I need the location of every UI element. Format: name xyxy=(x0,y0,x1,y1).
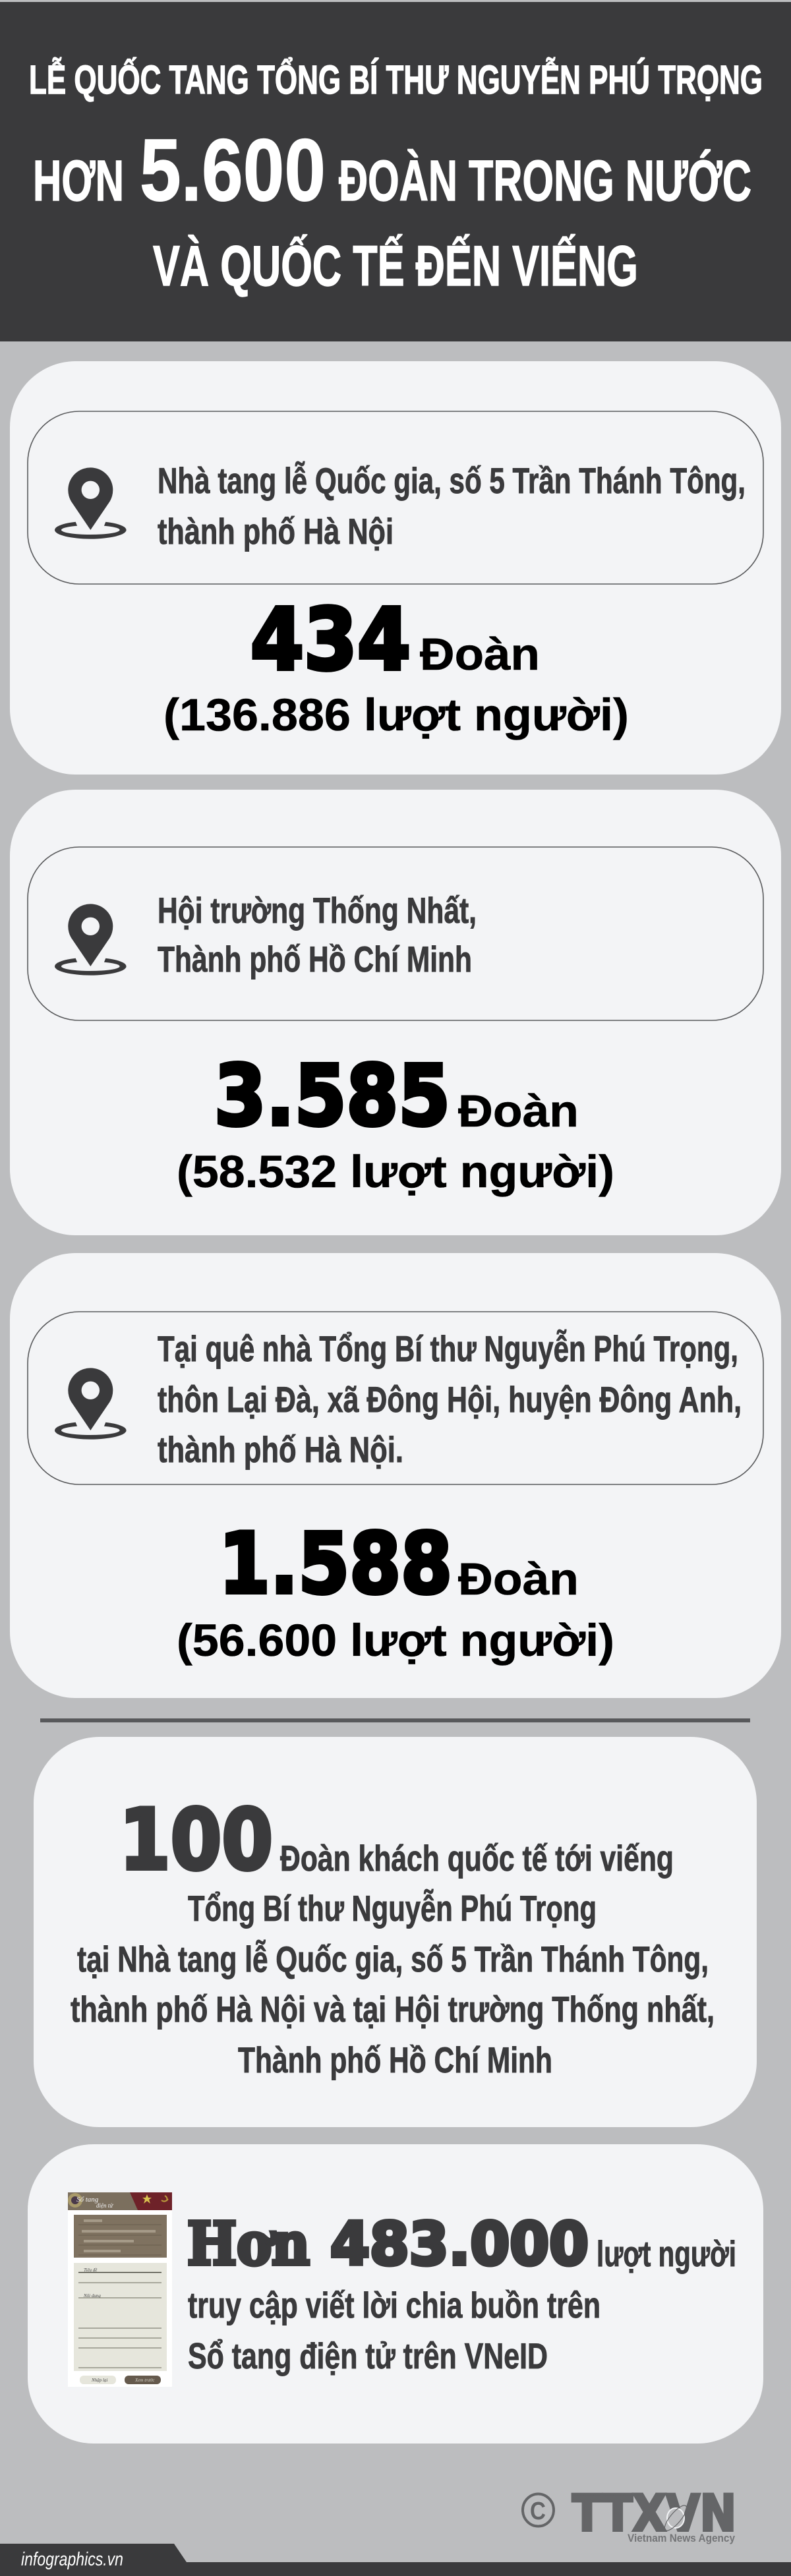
description text xyxy=(188,2233,736,2376)
website label: infographics.vn xyxy=(21,2549,123,2570)
stat: 3.585 đoàn: 3.585 xyxy=(214,1047,450,1144)
description text: Thành phố Hồ Chí Minh xyxy=(238,2039,552,2080)
stat: 434 đoàn xyxy=(163,591,629,740)
location text: Hội trường Thống Nhất, xyxy=(158,890,477,931)
logo: copyright TTXVN: TTXVN xyxy=(572,2484,736,2542)
location text: thành phố Hà Nội. xyxy=(158,1429,403,1470)
icon: location pin xyxy=(55,1368,127,1440)
screenshot: VNeID condolence book: Sổ tang xyxy=(76,2196,99,2204)
description text xyxy=(71,1838,715,2080)
screenshot: VNeID condolence book: Xem trước xyxy=(134,2378,155,2383)
stat: 434 đoàn: 434 xyxy=(250,591,411,689)
description text: Tổng Bí thư Nguyễn Phú Trọng xyxy=(188,1888,597,1929)
stat: 3.585 đoàn: (58.532 lượt người) xyxy=(177,1146,614,1197)
icon: location pin xyxy=(55,904,127,976)
screenshot: VNeID condolence book: điện tử xyxy=(96,2202,113,2209)
logo: copyright TTXVN: C xyxy=(530,2498,546,2525)
icon: location pin xyxy=(55,467,127,539)
stat: 1.588 đoàn: 1.588 xyxy=(219,1515,452,1612)
screenshot: VNeID condolence book: Nhập lại xyxy=(91,2378,107,2383)
title line 2 xyxy=(33,121,751,220)
description text: Sổ tang điện tử trên VNeID xyxy=(188,2335,548,2376)
stat: hơn 483.000: 483.000 xyxy=(330,2210,589,2278)
panel: sổ tang điện tử xyxy=(28,2144,763,2444)
footer bar xyxy=(0,2544,791,2576)
screenshot: VNeID condolence book: Nội dung xyxy=(83,2293,101,2298)
header banner xyxy=(0,2,791,341)
description text: truy cập viết lời chia buồn trên xyxy=(188,2285,601,2326)
stat: 3.585 đoàn xyxy=(177,1047,614,1197)
location text xyxy=(158,460,746,552)
stat: 1.588 đoàn: (56.600 lượt người) xyxy=(177,1615,614,1666)
location text: thành phố Hà Nội xyxy=(158,511,394,552)
stat: 434 đoàn: (136.886 lượt người) xyxy=(163,689,629,740)
panel: Hội trường Thống Nhất xyxy=(10,790,781,1235)
description text: Đoàn khách quốc tế tới viếng xyxy=(280,1838,674,1879)
screenshot: VNeID condolence book: Tiêu đề xyxy=(84,2268,98,2273)
stat: 100: 100 xyxy=(119,1791,273,1888)
stat: 1.588 đoàn: Đoàn xyxy=(458,1554,579,1604)
location text: Thành phố Hồ Chí Minh xyxy=(158,939,472,980)
stat: hơn 483.000: Hơn xyxy=(187,2209,310,2278)
screenshot: VNeID condolence book xyxy=(68,2192,172,2387)
stat: hơn 483.000 xyxy=(187,2209,589,2278)
location text xyxy=(158,890,477,980)
logo: copyright TTXVN xyxy=(523,2484,736,2544)
title line 2: HƠN xyxy=(33,149,124,213)
logo: copyright TTXVN: Vietnam News Agency xyxy=(628,2532,735,2544)
panel: đoàn quốc tế xyxy=(34,1737,757,2127)
panel: Nhà tang lễ Quốc gia xyxy=(10,361,781,775)
title line 2: 5.600 xyxy=(140,121,326,220)
description text: lượt người xyxy=(597,2233,736,2274)
location text xyxy=(158,1328,742,1470)
stat: 3.585 đoàn: Đoàn xyxy=(458,1086,579,1136)
stat: 1.588 đoàn xyxy=(177,1515,614,1666)
stat: 434 đoàn: Đoàn xyxy=(420,629,540,680)
panel: quê nhà xyxy=(10,1253,781,1698)
